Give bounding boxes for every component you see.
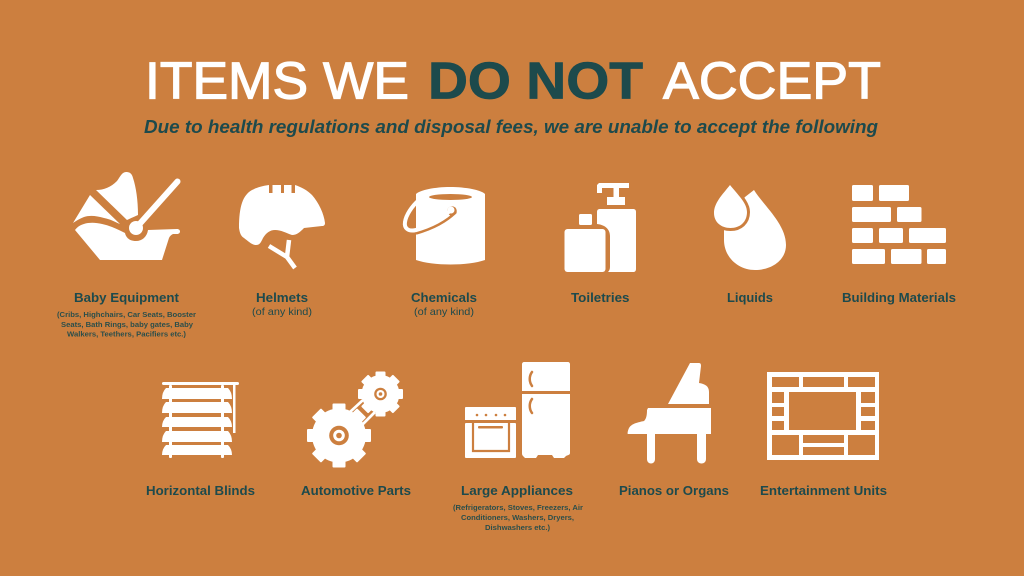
label: Helmets xyxy=(256,290,308,305)
details: Dishwashers etc.) xyxy=(485,523,550,532)
item: baby equipment xyxy=(57,172,196,338)
details xyxy=(57,310,196,338)
label: Chemicals xyxy=(411,290,477,305)
title: ITEMS WE xyxy=(145,51,409,109)
icon: helmet xyxy=(239,180,325,268)
label: Building Materials xyxy=(842,290,956,305)
details: Conditioners, Washers, Dryers, xyxy=(461,513,574,522)
title xyxy=(145,51,881,109)
details xyxy=(453,503,583,532)
label: Automotive Parts xyxy=(301,483,411,498)
item: pianos or organs xyxy=(619,363,729,498)
item: helmets xyxy=(239,180,325,318)
icon: wall unit xyxy=(767,372,879,460)
subtitle: Due to health regulations and disposal fees, we are unable to accept the following xyxy=(144,117,878,137)
qualifier: (of any kind) xyxy=(414,306,474,318)
icon: droplets xyxy=(714,185,786,270)
label: Large Appliances xyxy=(461,483,573,498)
icon: brick wall xyxy=(852,185,946,264)
details: Walkers, Teethers, Pacifiers etc.) xyxy=(67,330,186,338)
details: (Refrigerators, Stoves, Freezers, Air xyxy=(453,503,583,512)
label: Toiletries xyxy=(571,290,630,305)
label: Baby Equipment xyxy=(74,290,180,305)
icon: stove and refrigerator xyxy=(465,362,570,458)
item: building materials xyxy=(842,185,956,305)
icon: infant car seat xyxy=(73,172,180,260)
icon: paint bucket xyxy=(400,187,485,264)
label: Liquids xyxy=(727,290,773,305)
label: Entertainment Units xyxy=(760,483,887,498)
item: automotive parts xyxy=(301,372,411,498)
icon: bottles xyxy=(564,183,636,272)
title: ACCEPT xyxy=(663,51,881,109)
label: Horizontal Blinds xyxy=(146,483,255,498)
item: entertainment units xyxy=(760,372,887,498)
item: large appliances xyxy=(453,362,583,532)
icon: gears xyxy=(307,372,403,468)
qualifier: (of any kind) xyxy=(252,306,312,318)
item: liquids xyxy=(714,185,786,305)
item: chemicals xyxy=(400,187,485,318)
label: Pianos or Organs xyxy=(619,483,729,498)
icon: grand piano xyxy=(628,363,711,464)
title: DO NOT xyxy=(428,51,643,109)
icon: blinds xyxy=(162,382,239,458)
item: horizontal blinds xyxy=(146,382,255,498)
details: Seats, Bath Rings, baby gates, Baby xyxy=(61,320,194,329)
item: toiletries xyxy=(564,183,636,305)
details: (Cribs, Highchairs, Car Seats, Booster xyxy=(57,310,196,319)
